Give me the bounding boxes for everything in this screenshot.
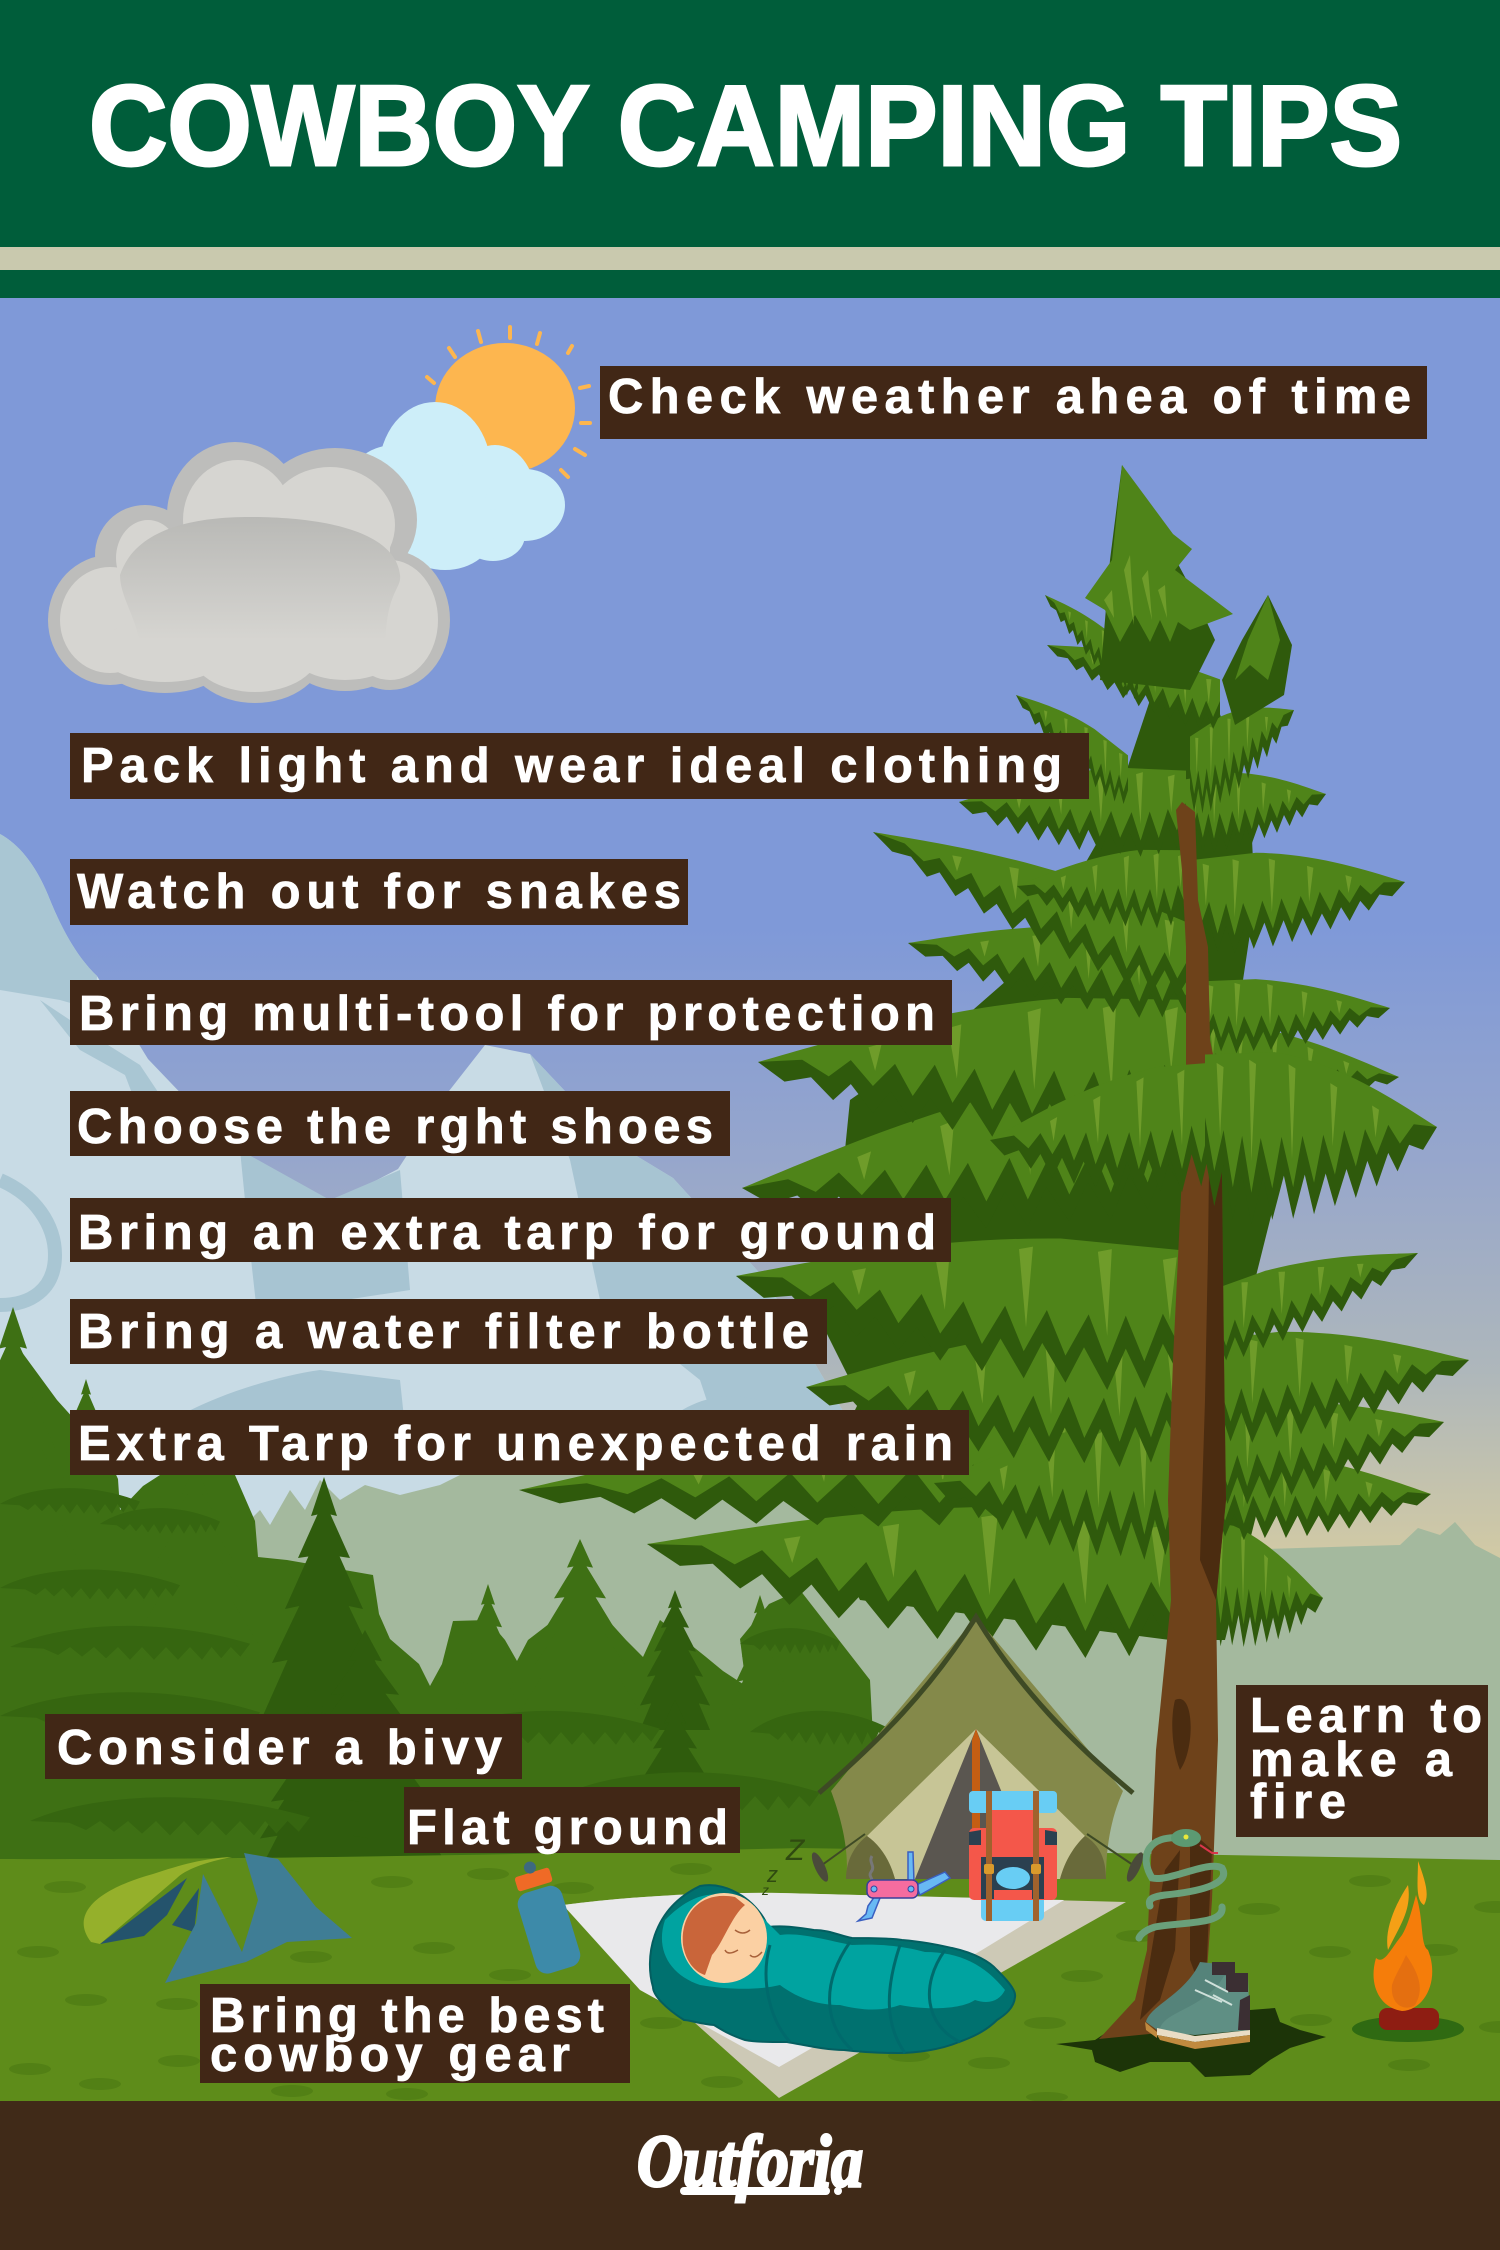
label: make a fire: fire (1250, 1775, 1346, 1829)
sleeping zzz: z (761, 1882, 769, 1898)
tree trunk (1099, 802, 1226, 2039)
snake on trunk (1139, 1829, 1224, 1938)
label: extra tarp rain: Extra Tarp for unexpected rain (78, 1417, 953, 1471)
sleeping zzz (761, 1834, 806, 1898)
ground (0, 1848, 1500, 2110)
label: extra tarp ground: Bring an extra tarp for ground (78, 1206, 936, 1260)
label: bivy: Consider a bivy (57, 1721, 502, 1775)
hiking boots (1145, 1962, 1250, 2049)
label: make a fire: make a (1250, 1733, 1453, 1787)
tarp (563, 1893, 1126, 2098)
forest pines (0, 1307, 790, 1759)
grey cloud (48, 442, 450, 703)
label: cowboy gear (200, 1984, 630, 2083)
label: flat ground: Flat ground (407, 1801, 728, 1855)
tree top (1085, 465, 1233, 690)
tree foliage core (810, 700, 1275, 1640)
footer logo: Outforia (637, 2121, 863, 2203)
mountains (0, 834, 860, 1560)
small right spike (1222, 595, 1292, 725)
camper head (681, 1893, 767, 1983)
label: snakes: Watch out for snakes (77, 865, 681, 919)
lower branches (519, 1323, 1469, 1683)
multi-tool (858, 1852, 950, 1921)
label: multi-tool: Bring multi-tool for protection (79, 987, 935, 1041)
sleeping zzz: Z (785, 1834, 806, 1867)
header band (0, 0, 1500, 298)
forest bough shading (0, 1488, 890, 1835)
sleeping bag with camper (650, 1885, 1015, 2053)
water bottle (506, 1855, 583, 1977)
upper branches (959, 579, 1326, 863)
label: pack light: Pack light and wear ideal clothing (81, 739, 1062, 793)
sleeping zzz: z (766, 1862, 778, 1887)
canvas tent (809, 1617, 1146, 1884)
label: make a fire: Learn to (1250, 1689, 1482, 1743)
trunk shading (1140, 1093, 1226, 2020)
label: shoes: Choose the rght shoes (77, 1100, 713, 1154)
bag highlights (662, 1894, 1005, 2010)
backpack (969, 1791, 1057, 1921)
footer band (0, 2101, 1500, 2250)
sun (427, 327, 590, 477)
label: cowboy gear: cowboy gear (210, 2028, 570, 2082)
ground spots (9, 1863, 1500, 2102)
label: make a fire (1236, 1685, 1488, 1837)
label: water filter: Bring a water filter bottle (78, 1305, 809, 1359)
distant sage tree line (230, 1470, 1500, 1880)
collapsed tent (84, 1853, 352, 1983)
campfire (1352, 1861, 1464, 2042)
title: COWBOY CAMPING TIPS (89, 63, 1402, 190)
label: check weather: Check weather ahea of time (608, 370, 1411, 424)
label: cowboy gear: Bring the best (210, 1989, 604, 2043)
tree shadow (1056, 2008, 1326, 2077)
crown over trunk (990, 1044, 1437, 1246)
big pine tree (519, 465, 1469, 2039)
middle branches (736, 803, 1418, 1393)
bag body (650, 1885, 1015, 2053)
blue cloud (345, 402, 565, 570)
background forest (0, 1307, 890, 1880)
